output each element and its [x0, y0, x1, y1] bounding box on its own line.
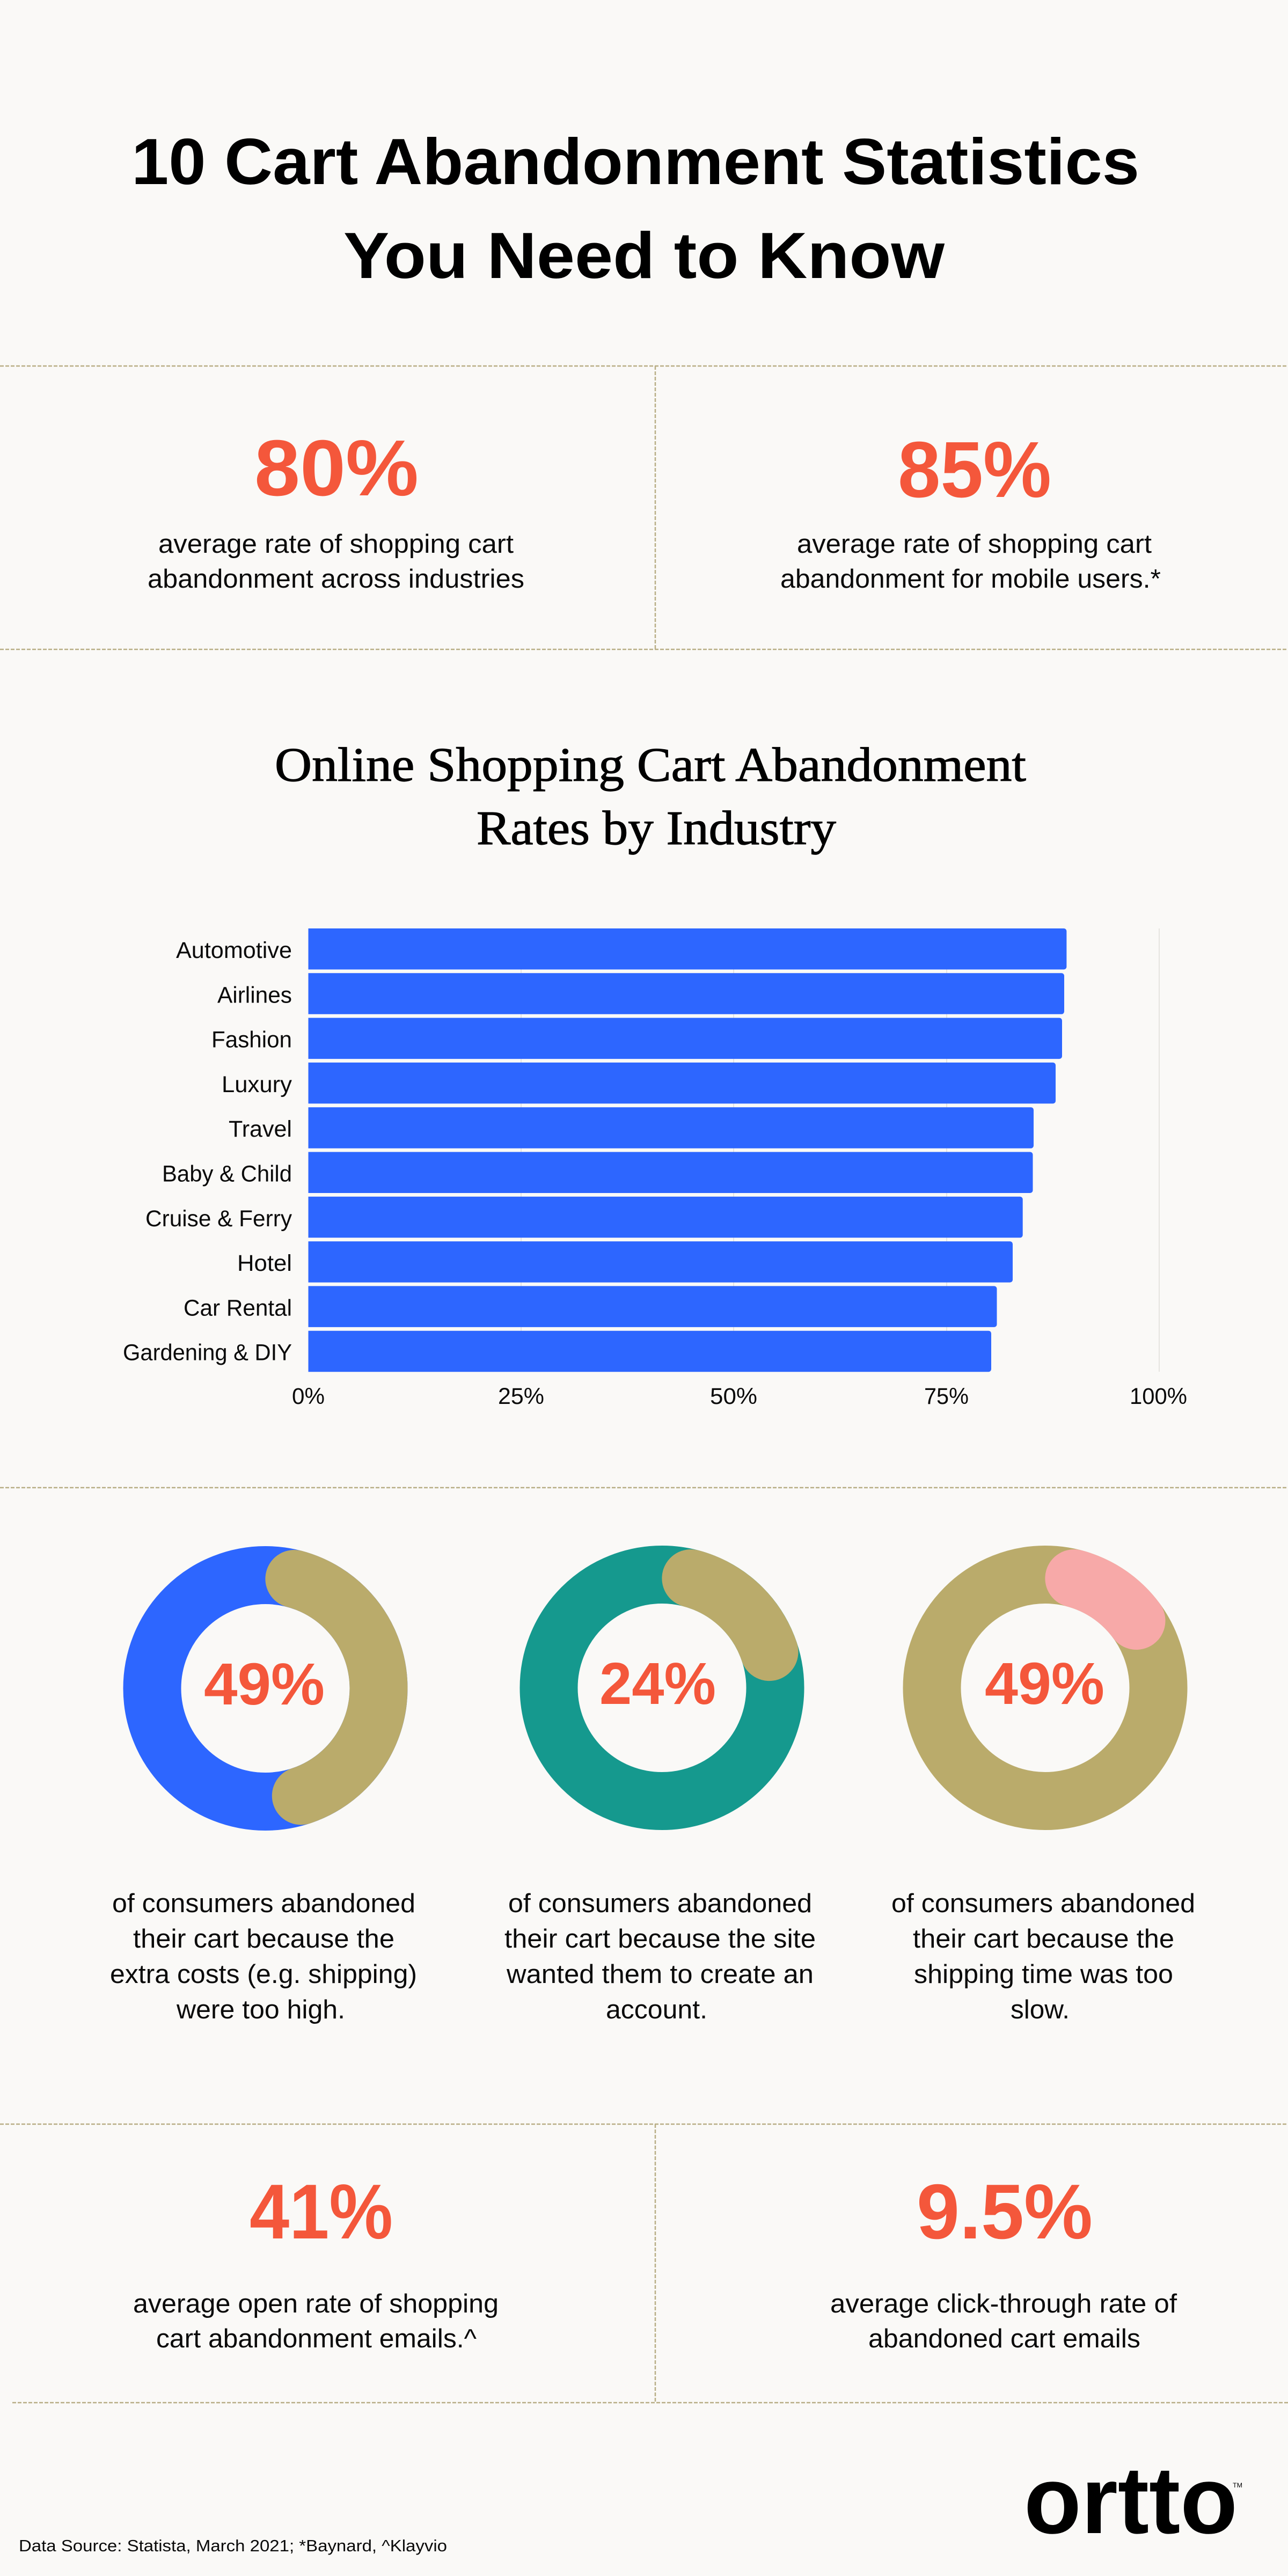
industry labels: Automotive	[176, 938, 292, 963]
donut caption: shipping time was too	[914, 1960, 1173, 1989]
donut caption	[504, 1889, 816, 2024]
donut value: 49%	[204, 1651, 325, 1717]
donut chart	[548, 1575, 775, 1801]
stat description: average open rate of shopping	[133, 2289, 499, 2318]
industry labels: Baby & Child	[162, 1161, 292, 1187]
stat number: 9.5%: 9.5%	[917, 2168, 1093, 2255]
donut caption: account.	[606, 1995, 707, 2024]
stat description: abandonment for mobile users.*	[780, 565, 1161, 594]
title: 10 Cart Abandonment Statistics	[131, 125, 1139, 198]
industry labels: Gardening & DIY	[123, 1340, 292, 1366]
x axis labels: 75%	[924, 1384, 969, 1409]
chart heading	[275, 738, 1026, 855]
donut caption: extra costs (e.g. shipping)	[110, 1960, 417, 1989]
bar chart: abandonment rates by industry	[123, 928, 1187, 1409]
stat number: 80%: 80%	[254, 424, 419, 513]
industry labels: Luxury	[222, 1072, 292, 1097]
stat description	[148, 530, 524, 594]
x axis labels: 0%	[292, 1384, 325, 1409]
stat description: abandoned cart emails	[868, 2324, 1140, 2353]
title	[131, 125, 1139, 292]
donut caption: their cart because the	[133, 1924, 394, 1953]
donut caption: wanted them to create an	[506, 1960, 814, 1989]
panel: donut 49% extra costs	[110, 1575, 417, 2024]
bars	[308, 928, 1066, 1372]
industry labels: Travel	[229, 1116, 292, 1142]
logo: ortto: ortto	[1024, 2447, 1238, 2553]
industry labels: Airlines	[217, 982, 292, 1008]
industry labels: Cruise & Ferry	[145, 1206, 292, 1232]
donut caption	[891, 1889, 1195, 2024]
stat description: cart abandonment emails.^	[156, 2324, 477, 2353]
chart heading: Rates by Industry	[477, 802, 836, 855]
stat number: 85%: 85%	[898, 426, 1051, 514]
panel: 80% stat	[148, 424, 524, 594]
panel: donut 49% shipping time	[891, 1575, 1195, 2024]
panel: 85% stat	[780, 426, 1161, 594]
stat description	[830, 2289, 1177, 2353]
chart heading: Online Shopping Cart Abandonment	[275, 738, 1026, 792]
stat description	[133, 2289, 499, 2353]
x axis labels: 25%	[498, 1384, 544, 1409]
stat description	[780, 530, 1161, 594]
donut caption	[110, 1889, 417, 2024]
donut caption: of consumers abandoned	[508, 1889, 812, 1918]
donut caption: of consumers abandoned	[112, 1889, 415, 1918]
x axis labels: 100%	[1130, 1384, 1187, 1409]
panel: 9.5% stat	[830, 2168, 1177, 2353]
donut chart	[932, 1575, 1158, 1801]
title: You Need to Know	[343, 219, 945, 292]
stat description: average click-through rate of	[830, 2289, 1177, 2318]
donut caption: were too high.	[176, 1995, 345, 2024]
x axis labels	[292, 1384, 1187, 1409]
industry labels	[123, 938, 292, 1366]
data source note: Data Source: Statista, March 2021; *Baynard, ^Klayvio	[19, 2536, 447, 2555]
donut caption: of consumers abandoned	[891, 1889, 1195, 1918]
stat description: average rate of shopping cart	[797, 530, 1152, 559]
panel: 41% stat	[133, 2168, 499, 2353]
x axis labels: 50%	[710, 1384, 757, 1409]
stat description: average rate of shopping cart	[158, 530, 514, 559]
donut chart	[152, 1575, 379, 1802]
logo: ortto: TM	[1233, 2482, 1242, 2489]
donut caption: their cart because the site	[504, 1924, 816, 1953]
donut caption: their cart because the	[913, 1924, 1174, 1953]
panel: donut 24% create account	[504, 1575, 816, 2024]
industry labels: Car Rental	[184, 1295, 292, 1321]
donut value: 24%	[599, 1651, 716, 1717]
stat number: 41%: 41%	[250, 2168, 393, 2255]
industry labels: Fashion	[211, 1027, 292, 1053]
stat description: abandonment across industries	[148, 565, 524, 594]
donut value: 49%	[985, 1651, 1104, 1717]
donut caption: slow.	[1011, 1995, 1070, 2024]
industry labels: Hotel	[237, 1250, 292, 1276]
